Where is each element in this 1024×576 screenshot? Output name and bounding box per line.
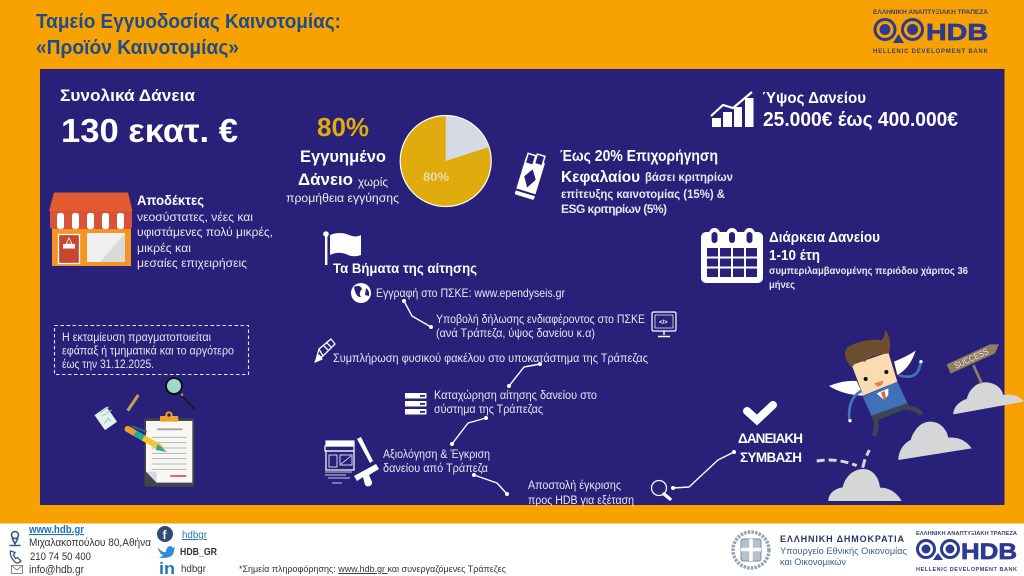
step 6: sending approval: προς HDB για εξέταση [528,493,634,507]
illustration: flying businessman and clouds: SUCCESS [953,346,990,371]
icon: flag [323,231,361,265]
footer contact block: info@hdb.gr [29,564,84,576]
connector 3 [450,416,488,446]
step 2: interest declaration [436,312,645,340]
step 2: interest declaration: (ανά Τράπεζα, ύψος δανείου κ.α) [436,326,595,340]
grant text block: ESG κριτηρίων (5%) [561,202,667,216]
ministry text block: Υπουργείο Εθνικής Οικονομίας [780,546,907,557]
grant text block: επίτευξης καινοτομίας (15%) & [561,187,725,201]
logo: HDB top right: HDB [926,19,988,45]
guaranteed loan text block: προμήθεια εγγύησης [286,191,399,205]
icon: location pin [10,532,20,546]
recipients text block: μεσαίες επιχειρήσεις [137,256,247,270]
logo: HDB top right [873,10,989,55]
callout: disbursement note: έως την 31.12.2025. [62,359,154,371]
title: Ταμείο Εγγυοδοσίας Καινοτομίας: [36,11,341,33]
step 5: evaluation: Αξιολόγηση & Έγκριση [383,447,490,461]
guaranteed loan text block: Εγγυημένο [300,147,386,166]
connector 4 [472,473,509,496]
logo: HDB top right: ΕΛΛΗΝΙΚΗ ΑΝΑΠΤΥΞΙΑΚΗ ΤΡΑΠΕΖΑ [873,10,989,16]
icon: calendar [701,228,763,283]
ministry text block: και Οικονομικών [780,557,846,568]
loan duration text block: συμπεριλαμβανομένης περιόδου χάριτος 36 [769,265,968,277]
footnote: *Σημεία πληροφόρησης: www.hdb.gr και συνεργαζόμενες Τράπεζες [239,564,506,575]
social: twitter handle: HDB_GR [180,546,217,558]
loan agreement label [738,431,803,465]
step 6: sending approval [528,478,634,507]
footer background [0,524,1024,576]
icon: mail [12,566,22,574]
icon: check mark [747,405,773,420]
social: linkedin handle: hdbgr [181,563,206,575]
icon: storefront [49,192,132,266]
step 1: registration with globe icon [351,283,565,303]
panel: main navy panel [40,69,1004,505]
footer contact block [28,524,152,576]
guaranteed loan text block: 80% [317,112,369,142]
loan amount text block [762,90,958,131]
icon: pencil [315,339,335,362]
icon: rising chart [711,92,754,127]
title [36,11,341,59]
ministry text block [780,534,907,568]
pie chart: 80% [400,116,491,206]
guaranteed loan text block: Δάνειο [298,170,353,189]
icon: twitter [158,546,175,558]
guaranteed loan text block: χωρίς [358,175,388,189]
illustration: clipboard with pen [94,378,195,487]
recipients text block: μικρές και [137,241,191,255]
grant text block: βάσει κριτηρίων [645,170,733,184]
icon: Hellenic Republic emblem [733,532,769,568]
icon: magnifier [652,480,670,499]
icon: facebook: f [162,528,168,542]
loan duration text block: Διάρκεια Δανείου [769,230,880,246]
logo: HDB top right: HELLENIC DEVELOPMENT BANK [873,49,989,55]
callout: disbursement note: Η εκταμίευση πραγματοποιείται [62,332,211,344]
social: facebook handle: hdbgr [182,529,207,541]
step 1: registration with globe icon: Εγγραφή στο ΠΣΚΕ: www.ependyseis.gr [376,286,565,300]
recipients text block: νεοσύστατες, νέες και [137,210,253,224]
steps heading: Τα Βήματα της αίτησης [333,261,477,276]
loan duration text block [769,230,968,291]
guaranteed loan text block [286,112,399,205]
icon: facebook [157,526,173,542]
illustration: flying businessman and clouds [817,330,1024,501]
total loans text block: 130 εκατ. € [61,112,238,149]
icon: money roll [514,151,548,200]
ministry text block: ΕΛΛΗΝΙΚΗ ΔΗΜΟΚΡΑΤΙΑ [780,534,904,544]
logo: HDB bottom right: HELLENIC DEVELOPMENT BANK [916,567,1017,573]
recipients text block [137,193,273,270]
step 2: interest declaration: Υποβολή δήλωσης ενδιαφέροντος στο ΠΣΚΕ [436,312,645,326]
step 6: sending approval: Αποστολή έγκρισης [528,478,621,492]
logo: HDB bottom right: HDB [961,539,1017,564]
connector 2 [507,362,542,388]
recipients text block: Αποδέκτες [137,193,204,208]
total loans text block [60,86,238,149]
step 5: evaluation: δανείου από Τράπεζα [383,461,488,475]
icon: monitor: </> [659,320,668,326]
loan duration text block: 1-10 έτη [769,248,820,264]
grant text block: Κεφαλαίου [561,169,640,186]
logo: HDB bottom right: ΕΛΛΗΝΙΚΗ ΑΝΑΠΤΥΞΙΑΚΗ ΤΡΑΠΕΖΑ [916,531,1017,537]
connector 5 [671,450,736,490]
icon: phone [10,551,21,563]
step 3: physical file: Συμπλήρωση φυσικού φακέλου στο υποκατάστημα της Τράπεζας [333,351,648,365]
step 4: application entry: Καταχώρηση αίτησης δανείου στο [434,388,597,402]
footer contact block: Μιχαλακοπούλου 80,Αθήνα [29,537,152,549]
callout: disbursement note: εφάπαξ ή τμηματικά και το αργότερο [62,346,234,358]
step 4: application entry [434,388,597,416]
icon: server [405,393,426,414]
icon: monitor [652,312,676,336]
loan agreement label: ΣΥΜΒΑΣΗ [740,450,802,465]
loan duration text block: μήνες [769,279,795,291]
callout: disbursement note [54,326,248,374]
title: «Προϊόν Καινοτομίας» [36,37,239,59]
footer contact block: 210 74 50 400 [30,551,91,563]
loan amount text block: 25.000€ έως 400.000€ [763,109,958,131]
total loans text block: Συνολικά Δάνεια [60,86,196,105]
icon: bank with stamp [325,437,379,486]
grant text block: Έως 20% Επιχορήγηση [560,148,718,165]
step 5: evaluation [383,447,490,475]
footer contact block: www.hdb.gr [28,524,85,536]
pie chart: 80%: 80% [423,170,449,184]
logo: HDB bottom right [916,531,1017,573]
grant text block [560,148,733,216]
loan amount text block: Ύψος Δανείου [762,90,866,107]
step 4: application entry: σύστημα της Τράπεζας [434,402,543,416]
loan agreement label: ΔΑΝΕΙΑΚΗ [738,431,803,446]
recipients text block: υφιστάμενες πολύ μικρές, [137,225,273,239]
connector 1 [402,299,433,329]
